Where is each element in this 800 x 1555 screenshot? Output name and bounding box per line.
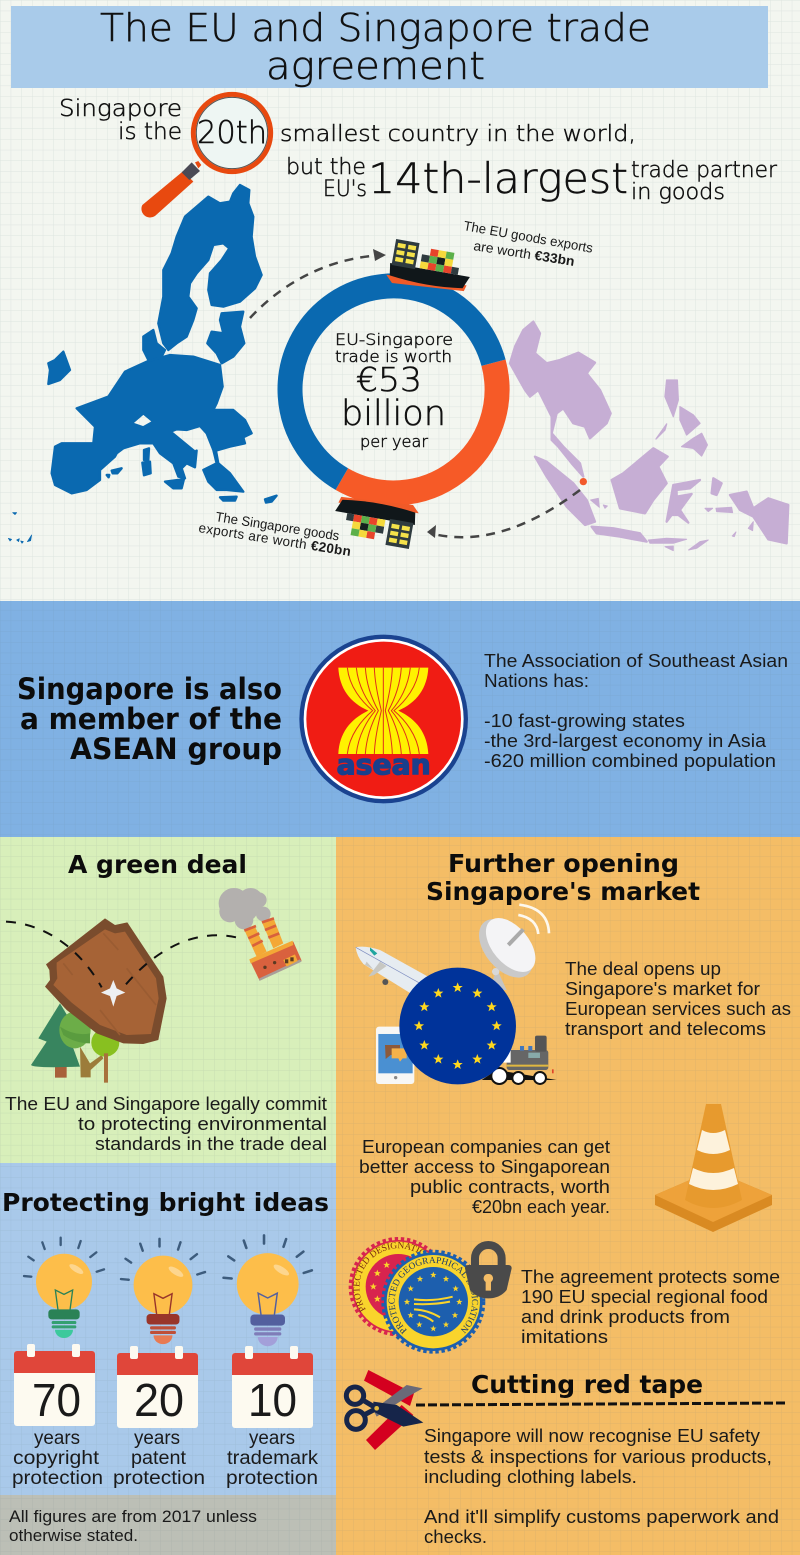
text: ring centre: EU-Singapore xyxy=(335,330,453,349)
text: 14th-largest trade partner: trade partner xyxy=(631,158,778,183)
calendar: 70 years: 70 xyxy=(32,1374,81,1426)
text: protected products xyxy=(521,1266,780,1347)
icon: EU cargo ship xyxy=(385,238,474,296)
icon: ASEAN logo xyxy=(299,635,468,803)
illustration: shield, trees and factory xyxy=(6,888,302,1083)
divider: dashed cut line xyxy=(416,1403,786,1405)
text: copyright protection: protection xyxy=(12,1468,103,1489)
text: 14th-largest trade partner: EU's xyxy=(323,177,367,202)
text: public contracts: €20bn each year. xyxy=(472,1196,610,1217)
text: Singapore is the 20th smallest: is the xyxy=(118,119,182,145)
text: 14th-largest trade partner: but the xyxy=(286,155,366,180)
title: The EU and Singapore trade xyxy=(100,6,651,50)
text: Singapore is the 20th smallest: Singapore xyxy=(59,96,182,122)
text: Singapore goods exports: The Singapore goods xyxy=(215,509,341,544)
icon: scissors cutting red tape xyxy=(346,1370,423,1450)
text: services: Singapore's market for xyxy=(565,978,760,999)
text: ASEAN facts: Nations has: xyxy=(484,670,589,691)
text: ring centre: billion xyxy=(341,394,446,434)
chart: trade ring xyxy=(290,286,497,493)
text: Singapore is the 20th smallest xyxy=(59,96,636,151)
title: agreement xyxy=(266,44,485,88)
text: protected products: and drink products from xyxy=(521,1306,730,1327)
arrow: Singapore exports xyxy=(427,490,580,538)
panel: green deal xyxy=(0,837,336,1163)
text: trademark protection xyxy=(226,1428,319,1489)
heading: Protecting bright ideas: Protecting bright ideas xyxy=(2,1188,329,1217)
text: services xyxy=(565,958,791,1039)
text: protected products: The agreement protects some xyxy=(521,1266,780,1287)
panel: further opening market xyxy=(336,837,800,1555)
icon: green light bulb xyxy=(24,1238,104,1338)
text: trademark protection: years xyxy=(249,1428,295,1449)
calendar: 70 years xyxy=(14,1344,95,1426)
text: safety tests and customs: Singapore will now recognise EU safety xyxy=(424,1425,761,1446)
text: 14th-largest trade partner xyxy=(286,154,778,205)
text: EU goods exports: are worth €33bn xyxy=(473,238,576,269)
heading: A green deal: A green deal xyxy=(68,850,247,879)
icon: purple light bulb xyxy=(224,1235,312,1346)
icon: food quality seals xyxy=(348,1237,486,1354)
text: public contracts: better access to Singaporean xyxy=(359,1156,610,1177)
text: 14th-largest trade partner: in goods xyxy=(631,180,725,205)
text: safety tests and customs xyxy=(424,1425,779,1547)
heading: ASEAN membership: a member of the xyxy=(20,702,282,736)
text: public contracts xyxy=(359,1136,610,1217)
text: ring centre xyxy=(335,330,453,451)
text: ring centre: €53 xyxy=(356,360,422,399)
text: services: transport and telecoms xyxy=(565,1018,766,1039)
text: safety tests and customs: And it'll simplify customs paperwork and xyxy=(424,1506,779,1527)
text: patent protection: years xyxy=(134,1428,180,1449)
icon: food quality seals: PROTECTED DESIGNATION xyxy=(353,1242,428,1312)
icon: magnifying glass xyxy=(141,94,271,218)
text: trademark protection: trademark xyxy=(227,1448,319,1469)
text: safety tests and customs: checks. xyxy=(424,1526,487,1547)
text: environmental commitment: The EU and Singapore legally commit xyxy=(5,1093,327,1114)
text: patent protection: patent xyxy=(131,1448,187,1469)
arrow: EU exports xyxy=(250,249,386,318)
heading: ASEAN membership: ASEAN group xyxy=(70,732,282,766)
text: safety tests and customs: including clothing labels. xyxy=(424,1466,637,1487)
text: services: The deal opens up xyxy=(565,958,721,979)
text: ring centre: trade is worth xyxy=(335,347,452,366)
map: Southeast Asia xyxy=(510,322,788,551)
panel: footnote xyxy=(0,1495,336,1555)
text: 14th-largest trade partner: 14th-largest xyxy=(368,154,628,203)
text: ASEAN facts: -the 3rd-largest economy in Asia xyxy=(484,730,767,751)
heading: ASEAN membership: Singapore is also xyxy=(17,672,282,706)
panel: footnote: All figures are from 2017 unless xyxy=(9,1507,257,1526)
text: copyright protection: years xyxy=(34,1428,80,1449)
text: ring centre: per year xyxy=(360,432,428,451)
text: ASEAN facts: -10 fast-growing states xyxy=(484,710,685,731)
title xyxy=(11,6,768,88)
text: Singapore is the 20th smallest: 20th xyxy=(197,115,267,151)
text: ASEAN facts: -620 million combined population xyxy=(484,750,776,771)
text: public contracts: European companies can get xyxy=(362,1136,610,1157)
icon: ASEAN logo: asean xyxy=(337,748,431,781)
panel: footnote: otherwise stated. xyxy=(9,1526,138,1545)
text: protected products: 190 EU special regional food xyxy=(521,1286,768,1307)
text: Singapore goods exports: exports are worth €20bn xyxy=(198,520,352,559)
text: protected products: imitations xyxy=(521,1326,608,1347)
text: safety tests and customs: tests & inspections for various products, xyxy=(424,1446,772,1467)
text: public contracts: public contracts, worth xyxy=(410,1176,610,1197)
illustration: services around EU flag xyxy=(356,905,557,1084)
panel: bright ideas xyxy=(0,1163,336,1495)
icon: traffic cone xyxy=(655,1104,772,1232)
text: environmental commitment xyxy=(5,1093,327,1154)
heading: ASEAN membership xyxy=(17,672,282,766)
panel: trade overview xyxy=(0,0,800,601)
text: copyright protection xyxy=(12,1428,103,1489)
text: patent protection xyxy=(113,1428,205,1489)
text: ASEAN facts: The Association of Southeast Asian xyxy=(484,650,788,671)
heading: Further opening Singapore's market xyxy=(426,849,700,906)
text: patent protection: protection xyxy=(113,1468,205,1489)
panel: ASEAN xyxy=(0,601,800,837)
text: EU goods exports: The EU goods exports xyxy=(462,218,594,256)
text: environmental commitment: standards in the trade deal xyxy=(95,1133,327,1154)
map: European Union xyxy=(8,185,277,543)
text: ASEAN facts xyxy=(484,650,788,771)
icon: padlock xyxy=(465,1245,512,1298)
calendar: 10 years xyxy=(232,1346,313,1428)
heading: Cutting red tape: Cutting red tape xyxy=(471,1370,703,1399)
icon: food quality seals: PROTECTED GEOGRAPHICAL INDICATION xyxy=(388,1256,478,1334)
text: copyright protection: copyright xyxy=(13,1448,100,1469)
text: services: European services such as xyxy=(565,998,791,1019)
text: environmental commitment: to protecting environmental xyxy=(78,1113,327,1134)
text: trademark protection: protection xyxy=(226,1468,318,1489)
calendar: 20 years xyxy=(117,1346,198,1428)
icon: red light bulb xyxy=(121,1239,205,1344)
text: Singapore is the 20th smallest: smallest country in the world, xyxy=(280,122,636,147)
heading: Further opening Singapore's market: Further opening xyxy=(448,849,679,878)
heading: Further opening Singapore's market: Singapore's market xyxy=(426,877,700,906)
calendar: 10 years: 10 xyxy=(248,1374,297,1426)
calendar: 20 years: 20 xyxy=(134,1374,184,1426)
icon: Singapore cargo ship xyxy=(331,492,420,550)
